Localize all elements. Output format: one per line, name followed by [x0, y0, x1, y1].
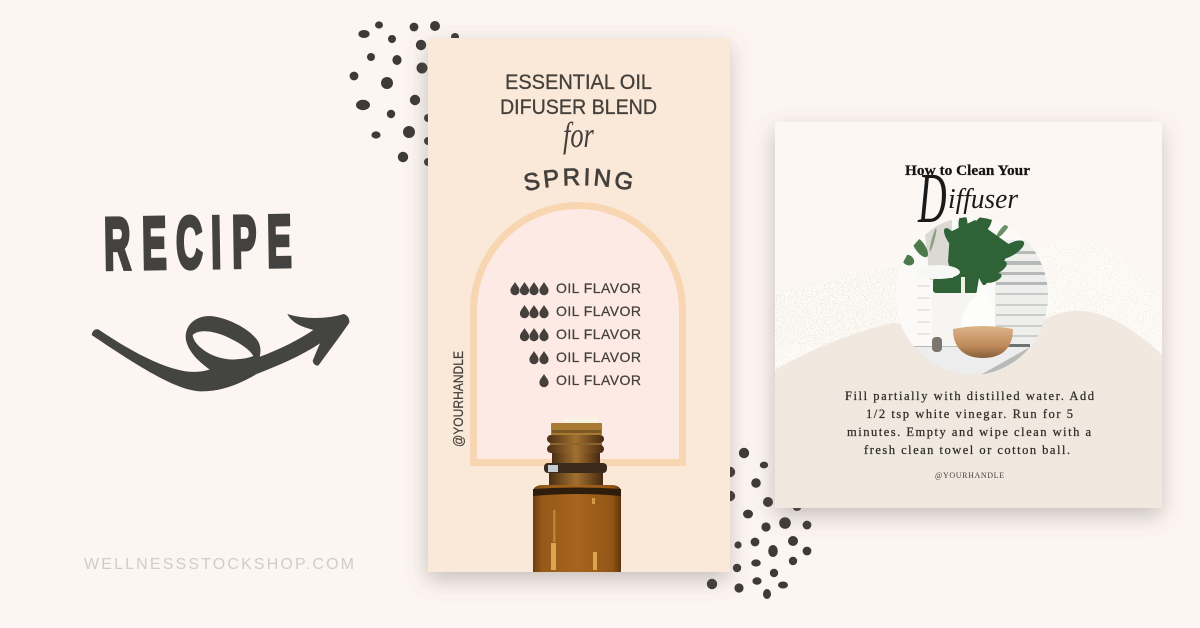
oil row 4: OIL FLAVOR [556, 349, 641, 365]
mist [961, 278, 983, 328]
oil row 1: OIL FLAVOR [556, 280, 641, 296]
heading: recipe: RECIPE [103, 202, 292, 285]
table [913, 346, 1031, 375]
circular photo [896, 217, 1048, 375]
left blinds [917, 285, 930, 335]
plant leaves [903, 217, 1024, 293]
card title: DIFUSER BLEND [500, 96, 657, 119]
instructions: 1/2 tsp white vinegar. Run for 5 [866, 407, 1073, 421]
lower dot pattern [707, 448, 811, 599]
curved heading: spring: SPRING [524, 168, 632, 190]
instructions: fresh clean towel or cotton ball. [864, 443, 1070, 457]
drop recipe list [510, 280, 641, 388]
white pot [931, 293, 982, 345]
card title: How to Clean Your [905, 163, 1030, 179]
stone [932, 337, 942, 352]
oil row 5: OIL FLAVOR [556, 372, 641, 388]
amber bottle [533, 418, 621, 572]
card background [428, 38, 730, 572]
white flowers [928, 265, 960, 279]
oil row 3: OIL FLAVOR [556, 326, 641, 342]
oil row 2: OIL FLAVOR [556, 303, 641, 319]
instructions: minutes. Empty and wipe clean with a [847, 425, 1091, 439]
arch frame [474, 205, 682, 462]
wood diffuser [953, 326, 1013, 358]
card background [775, 122, 1162, 508]
instructions: Fill partially with distilled water. Add [845, 389, 1095, 403]
panel: how to clean your diffuser card [775, 122, 1162, 508]
arrow [92, 314, 349, 391]
card title [500, 71, 657, 119]
upper dot pattern [350, 21, 459, 166]
script word: diffuser: D [917, 158, 947, 238]
speckled hills [775, 240, 1162, 508]
script word: diffuser [917, 158, 1019, 238]
panel: spring blend card [416, 35, 740, 591]
script word: for: for [563, 115, 594, 155]
window blinds [995, 240, 1051, 345]
handle: @YOURHANDLE [450, 351, 466, 447]
instructions [845, 389, 1095, 457]
website label: WELLNESSSTOCKSHOP.COM [84, 556, 354, 573]
script word: diffuser: iffuser [948, 183, 1019, 215]
card title: ESSENTIAL OIL [505, 71, 652, 94]
handle: @YOURHANDLE [935, 471, 1004, 480]
